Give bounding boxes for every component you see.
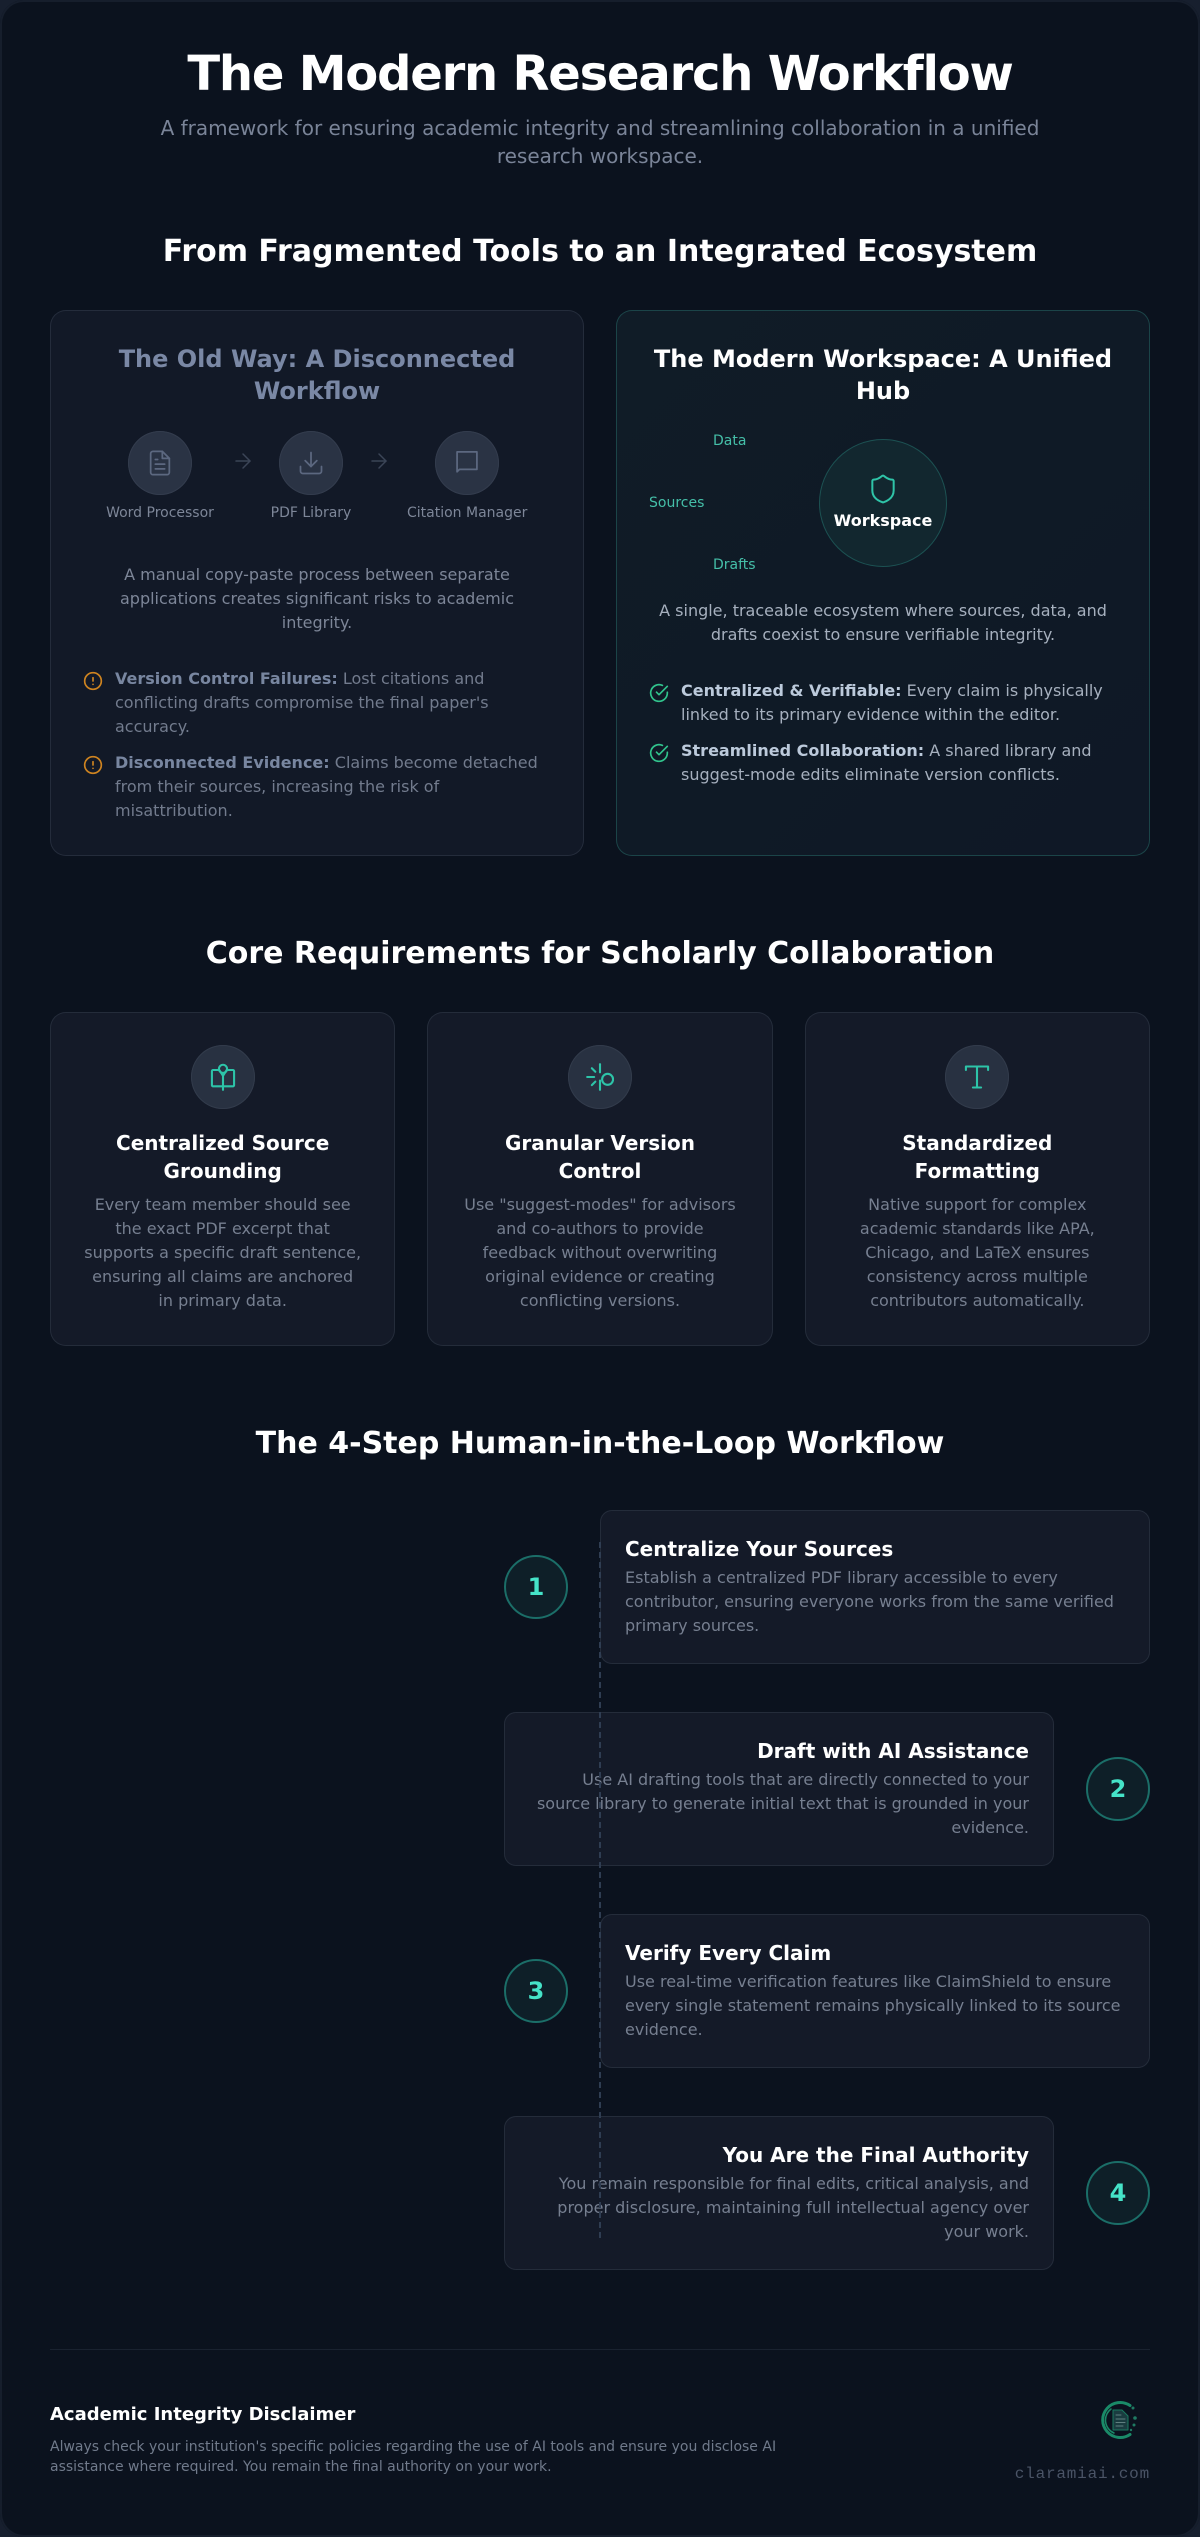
benefit text: [681, 681, 1103, 724]
step 3 card: [600, 1914, 1150, 2068]
benefit: centralized: [650, 681, 1103, 724]
label: drafts: Drafts: [713, 557, 756, 573]
arrow: [235, 453, 251, 469]
old way description: [120, 565, 514, 632]
card title: Centralized Source: [116, 1131, 329, 1155]
old way heading: [118, 345, 515, 405]
step text: evidence.: [951, 1818, 1029, 1837]
step text: You remain responsible for final edits, critical analysis, and: [559, 2174, 1029, 2193]
panel: standardized formatting: [805, 1012, 1150, 1346]
logo: [1101, 2401, 1137, 2439]
card text: the exact PDF excerpt that: [115, 1219, 330, 1238]
step 1 number: 1: [528, 1573, 544, 1601]
icon: check: [650, 744, 668, 762]
card title: Control: [559, 1159, 641, 1183]
step text: [625, 1568, 1114, 1635]
benefit text: Streamlined Collaboration: A shared library and: [681, 741, 1092, 760]
label: PDF Library: [271, 505, 351, 521]
step text: proper disclosure, maintaining full intellectual agency over: [557, 2198, 1029, 2217]
label: data: Data: [713, 433, 746, 449]
panel: the modern workspace: [616, 310, 1150, 856]
workspace hub: [819, 439, 947, 567]
step text: [537, 1770, 1029, 1837]
benefit text: suggest-mode edits eliminate version conflicts.: [681, 765, 1060, 784]
card text: [464, 1195, 736, 1310]
disclaimer text: assistance where required. You remain the final authority on your work.: [50, 2459, 552, 2475]
risk text: Disconnected Evidence: Claims become detached: [115, 753, 538, 772]
icon: version burst: [568, 1045, 632, 1109]
step 2 number: 2: [1110, 1775, 1126, 1803]
risk text: misattribution.: [115, 801, 233, 820]
modern workspace heading: The Modern Workspace: A Unified: [654, 345, 1112, 373]
card text: Every team member should see: [95, 1195, 351, 1214]
old way description: A manual copy-paste process between separate: [124, 565, 510, 584]
disclaimer text: Always check your institution's specific policies regarding the use of AI tools and ensure you disclose AI: [50, 2439, 776, 2455]
card title: [116, 1131, 329, 1183]
card text: [84, 1195, 361, 1310]
step 3 number: [504, 1959, 568, 2023]
card text: ensuring all claims are anchored: [92, 1267, 353, 1286]
step 2 card: [504, 1712, 1054, 1866]
arrow: [371, 453, 387, 469]
card title: Formatting: [915, 1159, 1040, 1183]
icon: type: [945, 1045, 1009, 1109]
icon: message square: [435, 431, 499, 495]
icon: alert: [84, 756, 102, 774]
benefit text: Centralized & Verifiable: Every claim is physically: [681, 681, 1103, 700]
risk text: [115, 669, 489, 736]
modern workspace heading: [654, 345, 1112, 405]
old way description: applications creates significant risks to academic: [120, 589, 514, 608]
card text: and co-authors to provide: [496, 1219, 704, 1238]
step 4 card: [504, 2116, 1054, 2270]
disclaimer title: Academic Integrity Disclaimer: [50, 2404, 355, 2425]
card text: conflicting versions.: [520, 1291, 680, 1310]
card text: Use "suggest-modes" for advisors: [464, 1195, 736, 1214]
card title: [505, 1131, 695, 1183]
risk: disconnected evidence: [84, 753, 538, 820]
old way description: integrity.: [282, 613, 352, 632]
tool: word processor: [106, 431, 214, 521]
card text: original evidence or creating: [485, 1267, 715, 1286]
step text: [557, 2174, 1029, 2241]
benefit: collaboration: [650, 741, 1092, 784]
risk text: conflicting drafts compromise the final paper's: [115, 693, 489, 712]
old way heading: The Old Way: A Disconnected: [119, 345, 515, 373]
card title: Standardized: [902, 1131, 1052, 1155]
icon: download: [279, 431, 343, 495]
step title: Draft with AI Assistance: [757, 1739, 1029, 1763]
card text: consistency across multiple: [867, 1267, 1088, 1286]
timeline dashed line: [599, 1542, 601, 2238]
subtitle: research workspace.: [497, 144, 703, 168]
card text: Chicago, and LaTeX ensures: [865, 1243, 1089, 1262]
step title: Centralize Your Sources: [625, 1537, 893, 1561]
step 4 number: 4: [1110, 2179, 1126, 2207]
risk text: [115, 753, 538, 820]
risk: version control: [84, 669, 489, 736]
step text: Use AI drafting tools that are directly connected to your: [582, 1770, 1029, 1789]
step text: Establish a centralized PDF library accessible to every: [625, 1568, 1058, 1587]
card title: [902, 1131, 1052, 1183]
tool: pdf library: [271, 431, 351, 521]
step text: source library to generate initial text that is grounded in your: [537, 1794, 1029, 1813]
tool: citation manager: [407, 431, 528, 521]
label: Word Processor: [106, 505, 214, 521]
subtitle: A framework for ensuring academic integrity and streamlining collaboration in a unified: [161, 116, 1039, 140]
step 2 number: [1086, 1757, 1150, 1821]
modern workspace description: A single, traceable ecosystem where sources, data, and: [659, 601, 1107, 620]
label: Citation Manager: [407, 505, 527, 521]
card title: Granular Version: [505, 1131, 695, 1155]
icon: book: [191, 1045, 255, 1109]
step text: evidence.: [625, 2020, 703, 2039]
heading: 4-step workflow: The 4-Step Human-in-the-Loop Workflow: [256, 1426, 944, 1461]
benefit text: linked to its primary evidence within the editor.: [681, 705, 1060, 724]
step 1 card: [600, 1510, 1150, 1664]
risk text: accuracy.: [115, 717, 190, 736]
icon: check: [650, 684, 668, 702]
card text: Native support for complex: [868, 1195, 1086, 1214]
hub label: Workspace: [834, 511, 932, 530]
modern workspace heading: Hub: [856, 377, 910, 405]
card text: academic standards like APA,: [860, 1219, 1095, 1238]
icon: alert: [84, 672, 102, 690]
card text: contributors automatically.: [870, 1291, 1084, 1310]
benefit text: [681, 741, 1092, 784]
panel: the old way: [50, 310, 584, 856]
step text: [625, 1972, 1120, 2039]
step text: Use real-time verification features like ClaimShield to ensure: [625, 1972, 1111, 1991]
card title: Grounding: [164, 1159, 282, 1183]
step 3 number: 3: [528, 1977, 544, 2005]
step title: You Are the Final Authority: [723, 2143, 1029, 2167]
step title: Verify Every Claim: [625, 1941, 831, 1965]
step text: contributor, ensuring everyone works from the same verified: [625, 1592, 1114, 1611]
modern workspace description: [659, 601, 1107, 644]
heading: core requirements: Core Requirements for Scholarly Collaboration: [206, 936, 994, 971]
website: claramiai.com: [1015, 2465, 1150, 2483]
step text: primary sources.: [625, 1616, 759, 1635]
modern workspace description: drafts coexist to ensure verifiable integrity.: [711, 625, 1055, 644]
risk text: Version Control Failures: Lost citations and: [115, 669, 484, 688]
panel: centralized source grounding: [50, 1012, 395, 1346]
disclaimer text: [50, 2439, 776, 2475]
panel: granular version control: [427, 1012, 773, 1346]
icon: document: [128, 431, 192, 495]
risk text: from their sources, increasing the risk of: [115, 777, 439, 796]
label: sources: Sources: [649, 495, 704, 511]
footer divider: [50, 2349, 1150, 2350]
card text: feedback without overwriting: [483, 1243, 717, 1262]
step 1 number: [504, 1555, 568, 1619]
heading: fragmented to integrated: From Fragmented Tools to an Integrated Ecosystem: [163, 234, 1037, 269]
step text: every single statement remains physically linked to its source: [625, 1996, 1120, 2015]
icon: shield: [871, 474, 895, 504]
title: The Modern Research Workflow: [187, 46, 1013, 102]
card text: [860, 1195, 1095, 1310]
old way heading: Workflow: [254, 377, 380, 405]
subtitle: [160, 116, 1039, 168]
disclaimer: [50, 2404, 776, 2475]
card text: supports a specific draft sentence,: [84, 1243, 361, 1262]
card text: in primary data.: [158, 1291, 287, 1310]
step text: your work.: [944, 2222, 1029, 2241]
step 4 number: [1086, 2161, 1150, 2225]
